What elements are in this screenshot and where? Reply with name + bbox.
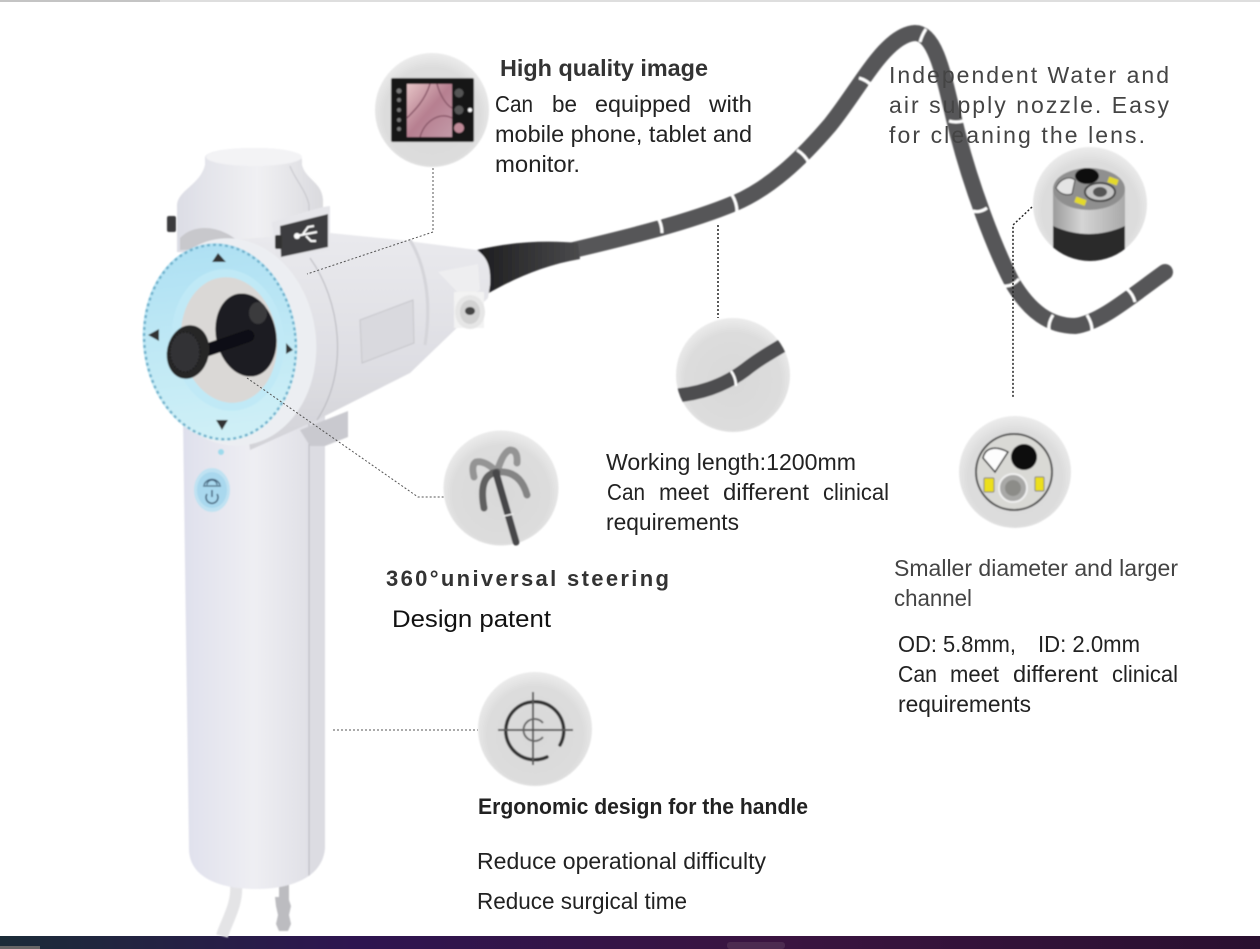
- water connector: [454, 292, 485, 329]
- text: water and air nozzle: air supply nozzle. Easy: [889, 92, 1170, 118]
- text: OD ID specs: meet: [950, 661, 1000, 687]
- icon circle: steering palm: [444, 430, 558, 546]
- text: high quality image: monitor.: [495, 151, 580, 177]
- handle: [183, 410, 325, 890]
- usb symbol: [296, 226, 317, 241]
- text: reduce time: Reduce surgical time: [477, 888, 687, 914]
- text: high quality image: High quality image: [500, 55, 708, 81]
- text: smaller diameter: channel: [894, 585, 972, 611]
- text: working length: Working length:1200mm: [606, 449, 856, 475]
- steering ring: [132, 229, 328, 455]
- icon circle: tablet screen: [375, 53, 489, 167]
- indicator LED: [218, 449, 224, 455]
- power button: [194, 468, 230, 512]
- black strain relief cone: [477, 242, 580, 294]
- handle neck shadow: [300, 411, 348, 446]
- hollow center: [174, 272, 284, 408]
- text: high quality image: mobile phone, tablet and: [495, 121, 752, 147]
- icon circle: scope tip side view: [1033, 147, 1147, 262]
- main body: [225, 233, 490, 450]
- text: high quality image: be: [552, 91, 577, 117]
- text: ergonomic design: Ergonomic design for the handle: [478, 794, 808, 819]
- icon circle: scope tip front view: [959, 416, 1071, 528]
- top browser edge: [0, 0, 1260, 2]
- top cap: [167, 148, 323, 262]
- text: smaller diameter: Smaller diameter and larger: [894, 555, 1178, 581]
- text: reduce difficulty: Reduce operational difficulty: [477, 848, 766, 874]
- text: working length: clinical: [823, 479, 889, 505]
- direction arrows: [148, 253, 293, 430]
- text: water and air nozzle: [889, 62, 1170, 148]
- metal barb connector: [275, 882, 291, 931]
- icon circle: cable closeup: [672, 318, 795, 432]
- text: working length: Can: [607, 479, 645, 505]
- bottom dark taskbar: [0, 936, 1260, 949]
- cable depth markers: [657, 29, 1135, 330]
- text: high quality image: with: [708, 91, 752, 117]
- leader lines: [247, 168, 1032, 730]
- text: high quality image: equipped: [595, 91, 691, 117]
- text: OD ID specs: Can: [898, 661, 937, 687]
- text: working length: different: [723, 479, 810, 505]
- text: OD ID specs: OD: 5.8mm,: [898, 631, 1016, 657]
- text: smaller diameter: [894, 555, 1178, 611]
- text: design patent: Design patent: [392, 606, 551, 633]
- text: working length: [606, 449, 889, 535]
- text: OD ID specs: different: [1013, 661, 1099, 687]
- recessed panel: [360, 300, 414, 363]
- flexible insertion cable: [565, 29, 1165, 330]
- text: high quality image: [495, 55, 752, 177]
- text: water and air nozzle: for cleaning the lens.: [889, 122, 1145, 148]
- text: high quality image: Can: [495, 91, 533, 117]
- text: water and air nozzle: Independent Water and: [889, 62, 1169, 88]
- joystick: [162, 288, 284, 383]
- text: OD ID specs: ID: 2.0mm: [1038, 631, 1140, 657]
- text: working length: requirements: [606, 509, 739, 535]
- USB port cover: [272, 206, 330, 260]
- text: OD ID specs: clinical: [1112, 661, 1178, 687]
- text: 360 universal steering: 360°universal steering: [386, 566, 669, 591]
- endoscope device: [132, 29, 1165, 936]
- text: OD ID specs: requirements: [898, 691, 1031, 717]
- white tube under handle: [222, 884, 236, 936]
- icon circle: target: [478, 672, 592, 786]
- text: OD ID specs: [898, 631, 1178, 717]
- text: working length: meet: [659, 479, 710, 505]
